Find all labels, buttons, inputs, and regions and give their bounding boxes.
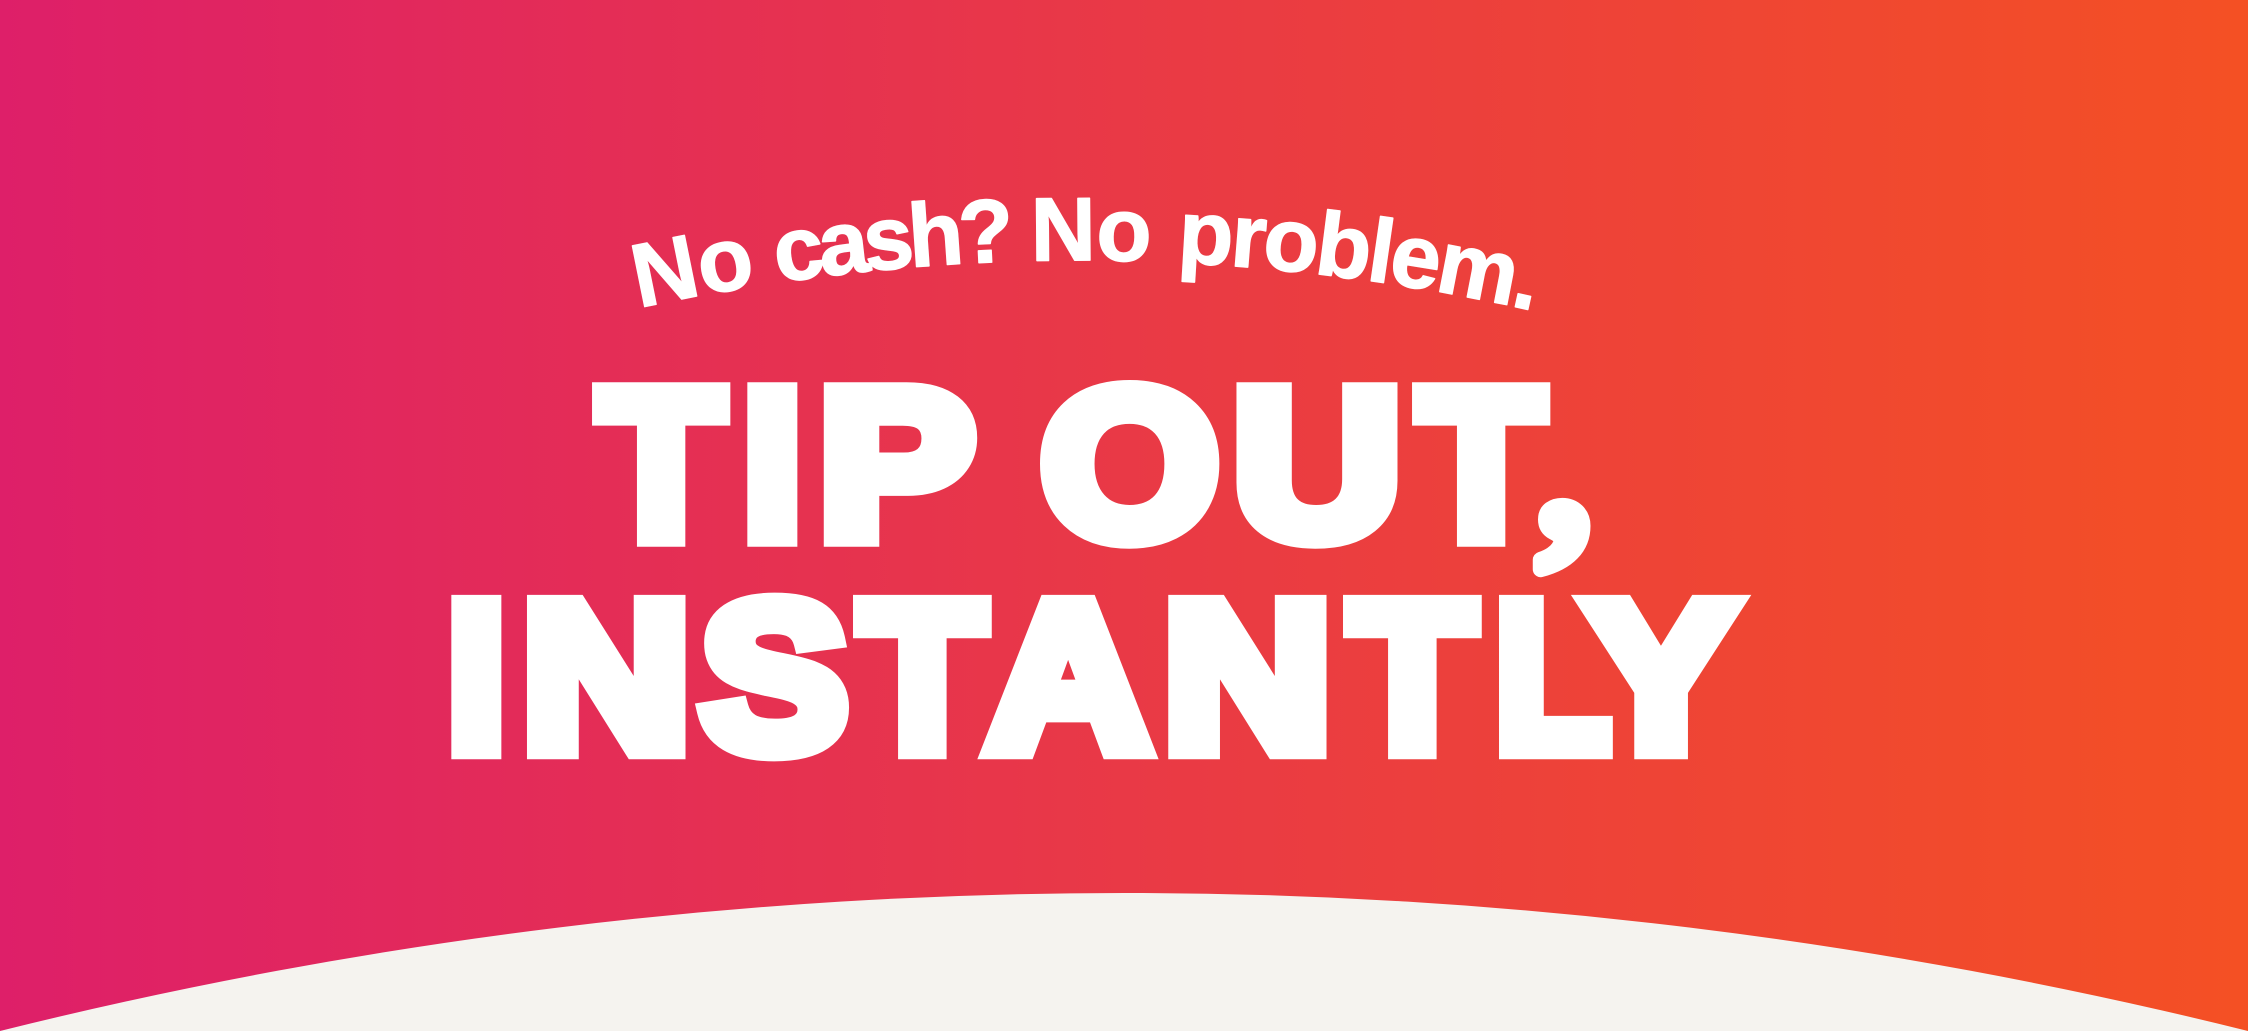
headline line 2: Y — [1586, 559, 1736, 794]
curved cream footer — [0, 893, 2250, 1031]
headline line 1: O — [1042, 347, 1218, 582]
headline line 1: T — [1419, 347, 1543, 582]
headline line 2: N — [522, 559, 690, 794]
headline line 2: S — [701, 559, 847, 794]
headline line 2: T — [1350, 559, 1474, 794]
headline line 2: I — [447, 559, 505, 794]
headline line 1: I — [743, 347, 801, 582]
headline line 2: A — [987, 559, 1149, 794]
headline line 2: L — [1495, 559, 1610, 794]
headline line 1: , — [1538, 351, 1590, 583]
headline line 1: U — [1234, 347, 1401, 582]
headline line 2: T — [860, 559, 984, 794]
headline line 1: T — [599, 347, 723, 582]
headline line 2: N — [1164, 559, 1331, 794]
headline line 1: P — [819, 347, 970, 582]
curved tagline: Nocash?No problem. — [632, 198, 1532, 310]
